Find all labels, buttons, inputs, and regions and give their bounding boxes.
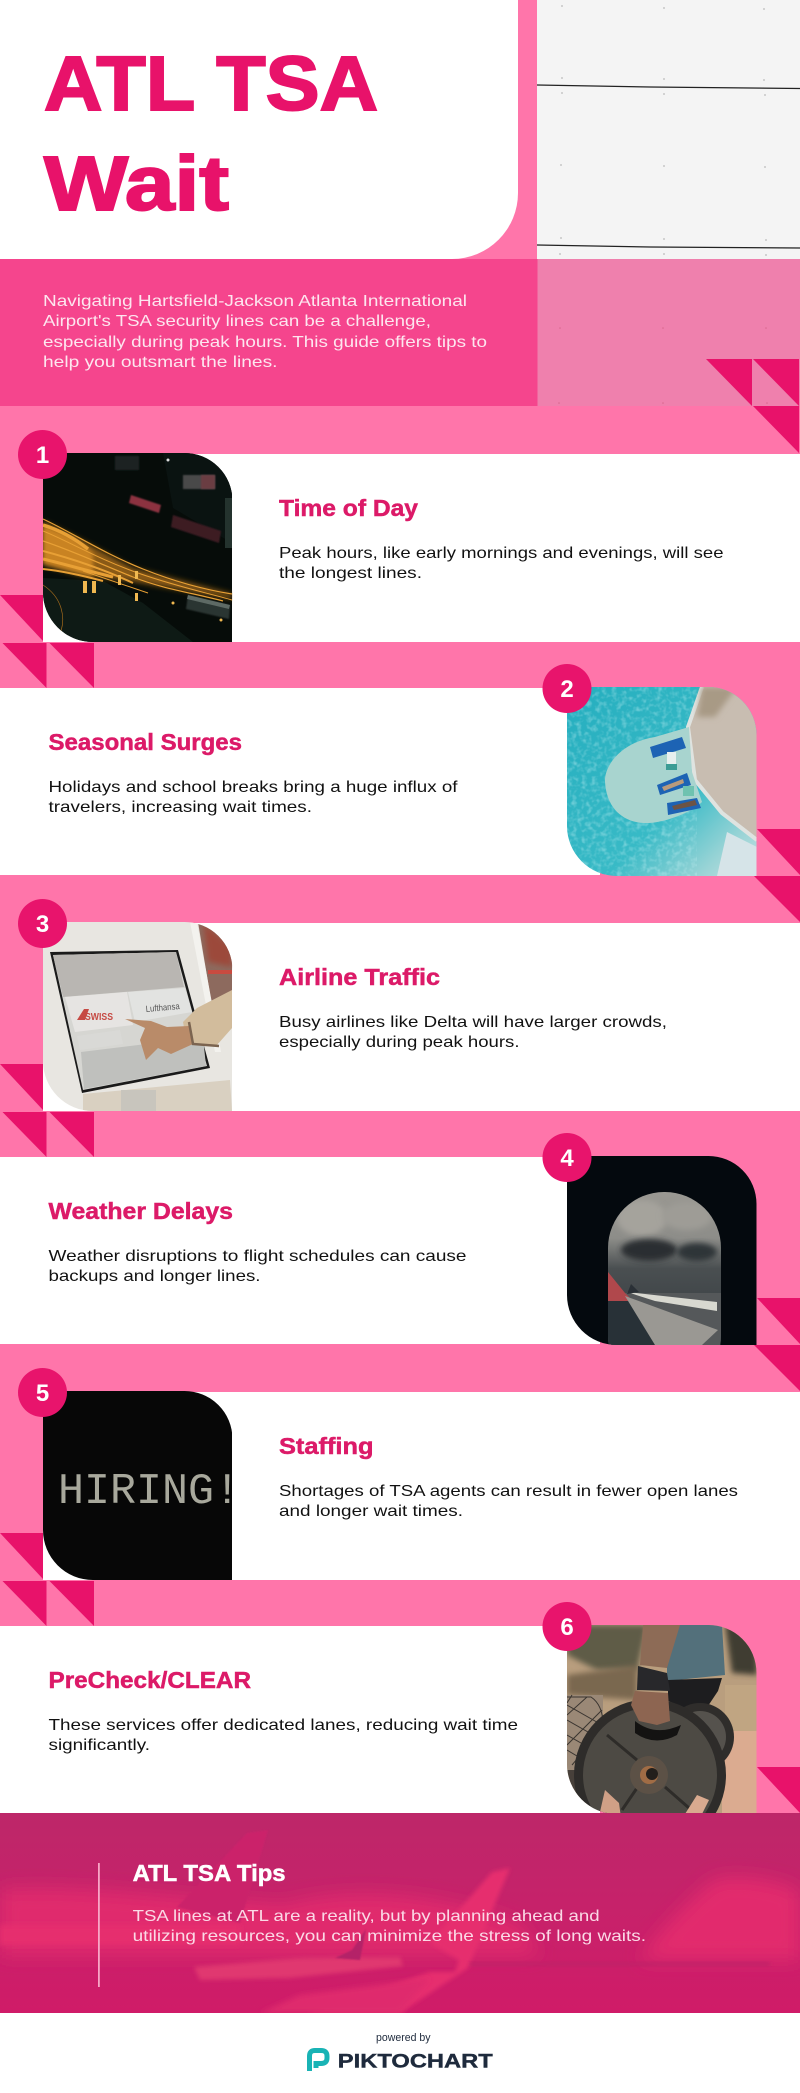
- heading: Weather Delays: [48, 1198, 233, 1224]
- number badge 1: 1: [36, 442, 49, 469]
- body text: significantly.: [48, 1737, 150, 1754]
- title panel: [0, 0, 518, 259]
- airport background photo: [0, 1830, 800, 2013]
- tips text: utilizing resources, you can minimize the stress of long waits.: [133, 1928, 646, 1945]
- row 1: time of day: [0, 430, 800, 688]
- tips heading: ATL TSA Tips: [133, 1860, 286, 1886]
- heading: Time of Day: [279, 495, 418, 521]
- body text: Busy airlines like Delta will have larger crowds,: [279, 1014, 667, 1031]
- title: [44, 41, 378, 227]
- photo: hiring chalkboard: HIRING: [58, 1467, 214, 1517]
- number badge 5: 5: [36, 1380, 49, 1407]
- body text: backups and longer lines.: [48, 1268, 260, 1285]
- body text: Holidays and school breaks bring a huge influx of: [48, 779, 458, 796]
- powered by label: powered by: [376, 2032, 431, 2044]
- row 6: precheck/clear: [0, 1602, 800, 1813]
- tips text: [133, 1908, 646, 1945]
- row 5: staffing: [0, 1368, 800, 1626]
- divider line: [98, 1863, 100, 1987]
- number badge 5: [18, 1368, 67, 1417]
- triangles right: [754, 1298, 800, 1391]
- body text: Shortages of TSA agents can result in fewer open lanes: [279, 1483, 738, 1500]
- body text: travelers, increasing wait times.: [48, 799, 312, 816]
- intro text: help you outsmart the lines.: [43, 354, 278, 371]
- row 4: weather delays: [0, 1133, 800, 1391]
- number badge 3: 3: [36, 911, 49, 938]
- heading: Seasonal Surges: [48, 729, 242, 755]
- body text: the longest lines.: [279, 565, 422, 582]
- hero photo: white panelled wall: [537, 0, 800, 406]
- intro text: [43, 293, 487, 371]
- photo: check-in kiosk: [43, 922, 232, 1111]
- wordmark: PIKTOCHART: [338, 2050, 493, 2072]
- triangles left: [0, 1064, 94, 1157]
- intro band: [0, 259, 800, 406]
- body text: Peak hours, like early mornings and evenings, will see: [279, 545, 724, 562]
- icon: piktochart logo: [310, 2050, 327, 2071]
- heading: PreCheck/CLEAR: [48, 1667, 251, 1693]
- triangles left: [0, 1533, 94, 1626]
- body text: Weather disruptions to flight schedules can cause: [48, 1248, 467, 1265]
- photo: airplane window: [567, 1156, 757, 1345]
- body text: and longer wait times.: [279, 1503, 463, 1520]
- title: ATL TSA: [44, 41, 378, 127]
- photo: hiring chalkboard: [43, 1391, 240, 1580]
- photo: pool: [567, 687, 757, 876]
- body text: [279, 545, 724, 582]
- row 2: seasonal surges: [0, 664, 800, 922]
- number badge 3: [18, 899, 67, 948]
- title: Wait: [44, 141, 229, 227]
- tips text: TSA lines at ATL are a reality, but by planning ahead and: [133, 1908, 600, 1925]
- triangle right: [757, 1767, 800, 1813]
- photo: night traffic: [43, 453, 232, 642]
- photo: check-in kiosk: Lufthansa: [145, 1001, 180, 1014]
- number badge 4: [542, 1133, 592, 1182]
- number badge 4: 4: [560, 1145, 574, 1172]
- tips panel: [0, 1813, 800, 2013]
- hero triangles: [706, 359, 799, 453]
- body text: [48, 1248, 467, 1285]
- photo text on screen: SWISS: [85, 1012, 113, 1023]
- body text: These services offer dedicated lanes, reducing wait time: [48, 1717, 518, 1734]
- footer background: [0, 2013, 800, 2093]
- row 3: airline traffic: [0, 899, 800, 1157]
- footer: powered by piktochart: [310, 2032, 493, 2072]
- body text: [48, 1717, 518, 1754]
- intro text: Navigating Hartsfield-Jackson Atlanta International: [43, 293, 467, 310]
- heading: Staffing: [279, 1433, 374, 1459]
- number badge 6: [542, 1602, 592, 1651]
- photo: weight plates: [567, 1625, 756, 1813]
- body text: especially during peak hours.: [279, 1034, 520, 1051]
- number badge 2: [542, 664, 592, 713]
- photo: hiring chalkboard: !: [214, 1467, 240, 1517]
- triangles left: [0, 595, 94, 688]
- intro text: especially during peak hours. This guide offers tips to: [43, 334, 487, 351]
- body text: [279, 1014, 667, 1051]
- number badge 6: 6: [560, 1614, 574, 1641]
- intro text: Airport's TSA security lines can be a challenge,: [43, 313, 431, 330]
- body text: [48, 779, 458, 816]
- heading: Airline Traffic: [279, 964, 440, 990]
- number badge 2: 2: [560, 676, 574, 703]
- triangles right: [754, 829, 800, 922]
- body text: [279, 1483, 738, 1520]
- number badge 1: [18, 430, 67, 479]
